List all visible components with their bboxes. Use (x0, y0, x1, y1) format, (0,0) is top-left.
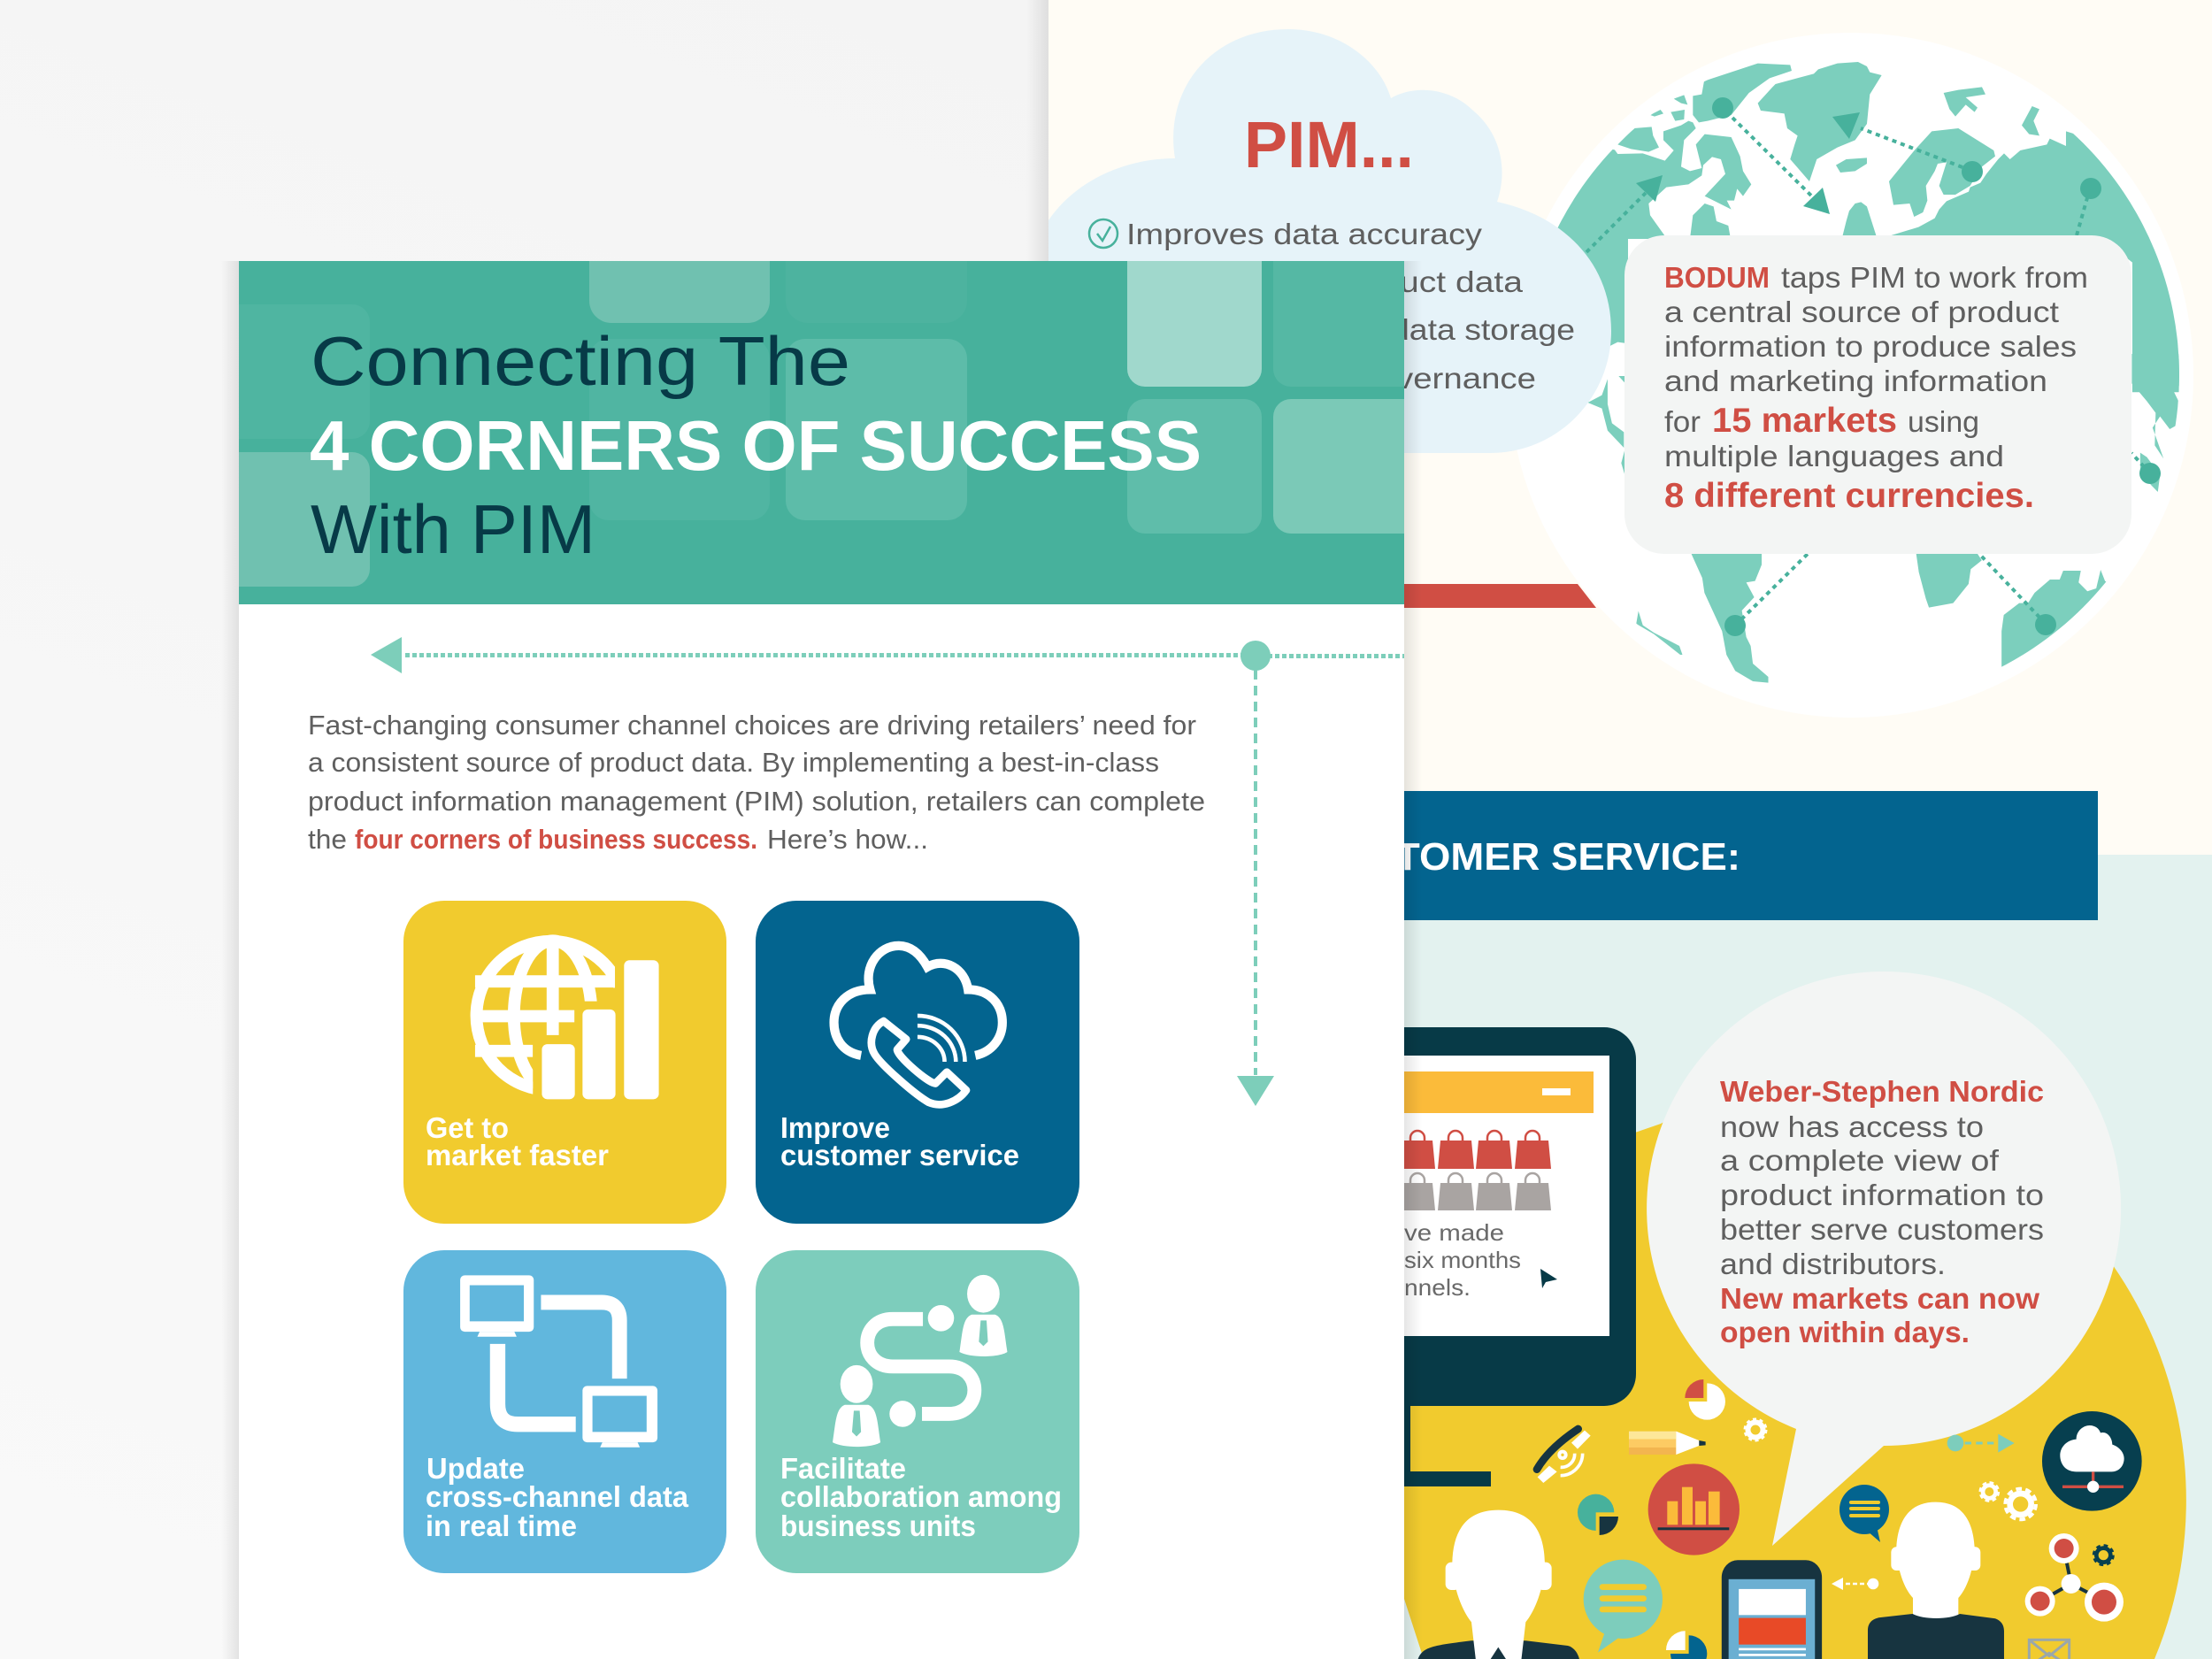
intro paragraph: a consistent source of product data. By implementing a best-in-class (308, 747, 1159, 778)
person: left (1417, 1510, 1579, 1659)
heading bar: customer service: TOMER SERVICE: (1395, 835, 1740, 879)
icon: dark gear (2093, 1546, 2113, 1565)
intro paragraph: Here’s how... (767, 824, 928, 855)
callout text: 8 different currencies. (1664, 477, 2034, 515)
monitor stand (1327, 1406, 1491, 1486)
callout text: BODUM (1664, 261, 1770, 294)
red banner strip (1327, 584, 1596, 608)
intro paragraph: the (308, 824, 347, 855)
callout text: 15 markets (1712, 402, 1897, 440)
bubble text: better serve customers (1720, 1213, 2044, 1246)
arrow: white dashed (1832, 1578, 1878, 1590)
callout text: multiple languages and (1664, 440, 2004, 472)
callout text: taps PIM to work from (1781, 261, 2088, 294)
title: Connecting The (311, 322, 850, 400)
bubble text: open within days. (1720, 1316, 1970, 1348)
bubble text: product information to (1720, 1179, 2044, 1211)
callout text: and marketing information (1664, 365, 2047, 397)
arrow: teal dashed (1947, 1434, 2015, 1453)
label: Update (426, 1452, 525, 1485)
icon: pie chart (1685, 1379, 1725, 1420)
panel: main card (221, 261, 1422, 1659)
intro paragraph (308, 710, 1205, 855)
icon: cloud phone (834, 946, 1002, 1104)
card: facilitate collaboration (756, 1250, 1079, 1573)
icon: cloud network (2042, 1411, 2142, 1511)
label: business units (780, 1509, 976, 1542)
icon: globe and bars (475, 939, 659, 1099)
callout text: a central source of product (1664, 296, 2059, 328)
screen text (1404, 1219, 1521, 1301)
icon: blue speech bubble (1839, 1485, 1889, 1542)
label: market faster (426, 1139, 609, 1171)
title: With PIM (311, 490, 595, 568)
card body (239, 261, 1404, 1659)
screen text: ve made (1404, 1219, 1504, 1246)
person: right (1868, 1502, 2004, 1659)
label (426, 1452, 689, 1542)
monitor body (1239, 1027, 1636, 1406)
icon: bar chart circle (1648, 1463, 1740, 1555)
label (426, 1111, 609, 1171)
bubble shape (1647, 972, 2121, 1546)
monitor screen (1283, 1056, 1609, 1336)
bubble text (1720, 1075, 2044, 1348)
dotted routes (1586, 118, 2150, 626)
icon: white gears (1980, 1483, 2036, 1519)
card: get to market faster (403, 901, 726, 1224)
shopping bags (1399, 1131, 1551, 1210)
monitor (1239, 1027, 1636, 1486)
intro paragraph: four corners of business success. (355, 824, 757, 855)
screen text: nnels. (1404, 1274, 1471, 1301)
panel: BODUM callout (1624, 235, 2131, 554)
icon: envelope (2029, 1640, 2070, 1659)
title (310, 322, 1202, 568)
speech bubble: Weber-Stephen (1647, 972, 2121, 1546)
icon cluster right on yellow (1868, 1411, 2142, 1659)
callout text: using (1908, 405, 1979, 438)
label (780, 1111, 1019, 1171)
card: update cross-channel data (403, 1250, 726, 1573)
intro paragraph: product information management (PIM) solution, retailers can complete (308, 786, 1205, 817)
bubble text: and distributors. (1720, 1248, 1946, 1280)
benefit list (1126, 218, 1575, 395)
globe map (1509, 33, 2212, 718)
title: 4 CORNERS OF SUCCESS (310, 406, 1202, 485)
card: improve customer service (756, 901, 1079, 1224)
decorative header tiles (239, 261, 1404, 587)
callout text: information to produce sales (1664, 330, 2077, 363)
globe disc (1509, 33, 2193, 718)
continents (1557, 62, 2179, 683)
label (780, 1452, 1062, 1542)
icon: teal pie (1578, 1494, 1619, 1536)
label: Get to (426, 1111, 509, 1144)
benefit list: data storage (1391, 313, 1575, 346)
icon: teal speech bubble (1584, 1560, 1663, 1653)
intro paragraph: Fast-changing consumer channel choices are driving retailers’ need for (308, 710, 1196, 741)
icon: cursor (1540, 1269, 1557, 1288)
label: collaboration among (780, 1480, 1062, 1513)
bubble text: a complete view of (1720, 1144, 2000, 1177)
icon: small bottom pie (1666, 1631, 1707, 1659)
card shadows (221, 261, 1422, 1659)
label: Facilitate (780, 1452, 906, 1485)
heading bar: customer service (1327, 791, 2098, 920)
label: customer service (780, 1139, 1019, 1171)
header band (239, 261, 1404, 604)
icon: network nodes (2025, 1533, 2124, 1622)
screen text: six months (1404, 1247, 1521, 1273)
heading: PIM: PIM... (1244, 108, 1414, 181)
panel: right page background (1026, 0, 2212, 1659)
bubble text: Weber-Stephen Nordic (1720, 1075, 2044, 1108)
arrow: dotted left and down (371, 637, 1404, 1106)
cloud shape (1048, 29, 1611, 453)
yellow background shape (1327, 1062, 2186, 1659)
bubble text: now has access to (1720, 1110, 1984, 1143)
benefit list: Improves data accuracy (1126, 218, 1483, 250)
icon: tablet (1722, 1560, 1822, 1659)
benefit list: vernance (1396, 362, 1536, 395)
bubble text: New markets can now (1720, 1282, 2039, 1315)
callout text (1664, 261, 2088, 515)
icon: telephone (1537, 1429, 1591, 1483)
label: Improve (780, 1111, 890, 1144)
route markers (1636, 97, 2161, 636)
orange title bar (1283, 1071, 1594, 1113)
benefit list: uct data (1400, 265, 1524, 298)
icon: pencil (1629, 1432, 1706, 1455)
gear on yellow (1745, 1419, 1766, 1440)
icon: connected monitors (460, 1275, 657, 1448)
icon: collaboration people (833, 1275, 1007, 1447)
icon: check mark (1089, 219, 1118, 248)
label: in real time (426, 1509, 577, 1542)
label: cross-channel data (426, 1480, 689, 1513)
icon cluster left on yellow (1417, 1379, 1740, 1659)
panel: PIM cloud (1048, 29, 1611, 453)
callout text: for (1664, 405, 1701, 438)
